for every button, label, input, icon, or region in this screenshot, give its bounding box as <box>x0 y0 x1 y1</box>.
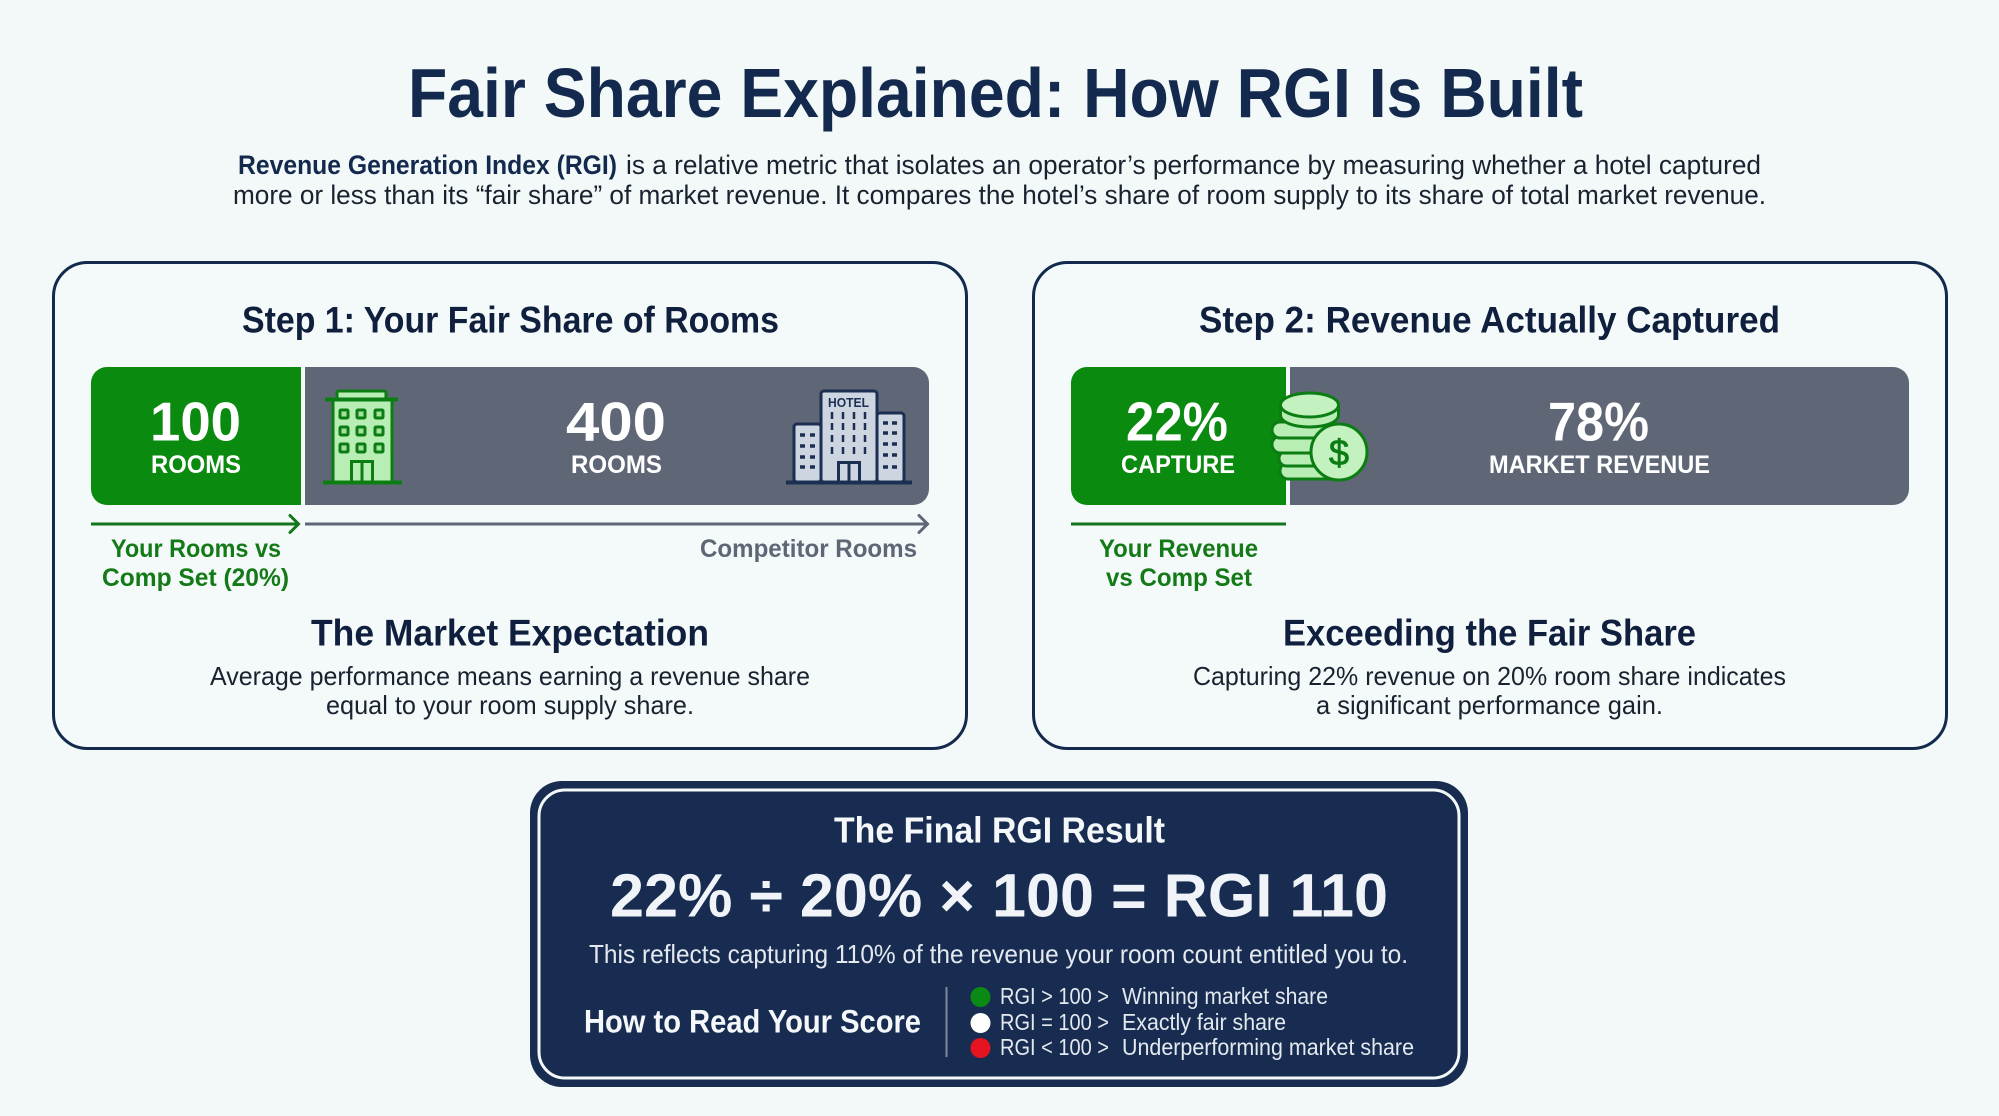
revenue bar: 78% <box>1548 390 1649 452</box>
market expectation text: Average performance means earning a revenue share <box>210 661 810 691</box>
title: Fair Share Explained: How RGI Is Built <box>408 54 1583 132</box>
fair share text: Capturing 22% revenue on 20% room share indicates <box>1193 661 1786 691</box>
step 2 heading: Step 2: Revenue Actually Captured <box>1199 300 1780 340</box>
result explanation: This reflects capturing 110% of the revenue your room count entitled you to. <box>589 939 1408 969</box>
market expectation text: equal to your room supply share. <box>326 690 694 720</box>
legend row: above 100: Winning market share <box>1122 983 1328 1009</box>
legend row: below 100: Underperforming market share <box>1122 1034 1414 1060</box>
rooms bar: ROOMS <box>151 451 241 479</box>
revenue bar <box>1071 367 1909 505</box>
rooms bar <box>91 367 929 505</box>
label: your rooms <box>102 535 289 592</box>
fair share text: a significant performance gain. <box>1316 690 1663 720</box>
icon: coin stack: $ <box>1329 432 1349 473</box>
intro text block: Revenue Generation Index (RGI) <box>238 150 617 180</box>
revenue bar: 22% <box>1126 390 1228 452</box>
fair share text <box>1193 661 1786 720</box>
rooms bar: ROOMS <box>571 451 662 479</box>
label: your rooms: Your Rooms vs <box>111 535 281 563</box>
arrow: your rooms <box>91 516 298 532</box>
formula: 22% ÷ 20% × 100 = RGI 110 <box>610 862 1388 930</box>
legend row: equal 100 <box>970 1009 1286 1035</box>
rooms bar: 400 <box>566 390 666 452</box>
icon: green hotel <box>323 391 402 482</box>
intro text block: is a relative metric that isolates an operator’s performance by measuring whether a hotel captured <box>626 150 1761 180</box>
label: competitor rooms: Competitor Rooms <box>700 535 917 563</box>
intro text block <box>233 150 1766 210</box>
legend row: below 100: RGI < 100 > <box>1000 1034 1109 1060</box>
rooms bar: 100 <box>150 390 241 452</box>
revenue bar: MARKET REVENUE <box>1489 451 1710 479</box>
icon: competitor hotels <box>786 391 912 482</box>
legend row: above 100 <box>970 983 1328 1009</box>
label: your revenue: vs Comp Set <box>1106 564 1253 592</box>
arrow: competitor rooms <box>305 516 928 532</box>
market expectation heading: The Market Expectation <box>311 612 709 654</box>
label: your revenue: Your Revenue <box>1099 535 1258 563</box>
legend row: below 100 <box>970 1034 1414 1060</box>
panel: step 2 <box>1034 262 1946 748</box>
icon: competitor hotels: HOTEL <box>828 395 869 410</box>
intro text block: more or less than its “fair share” of market revenue. It compares the hotel’s share of room supply to its share of total market revenue. <box>233 180 1766 210</box>
panel: step 1 <box>54 262 966 748</box>
legend: score bands <box>970 983 1414 1060</box>
legend row: above 100: RGI > 100 > <box>1000 983 1109 1009</box>
legend row: equal 100: RGI = 100 > <box>1000 1009 1109 1035</box>
market expectation text <box>210 661 810 720</box>
label: your revenue <box>1099 535 1258 592</box>
legend row: equal 100: Exactly fair share <box>1122 1009 1286 1035</box>
step 1 heading: Step 1: Your Fair Share of Rooms <box>242 300 779 340</box>
result heading: The Final RGI Result <box>834 810 1165 850</box>
fair share heading: Exceeding the Fair Share <box>1283 612 1696 654</box>
rule: your revenue <box>1071 522 1286 526</box>
score heading: How to Read Your Score <box>584 1004 921 1040</box>
icon: coin stack <box>1272 393 1367 480</box>
panel: final RGI result <box>530 781 1468 1087</box>
revenue bar: CAPTURE <box>1121 451 1235 479</box>
label: your rooms: Comp Set (20%) <box>102 564 289 592</box>
